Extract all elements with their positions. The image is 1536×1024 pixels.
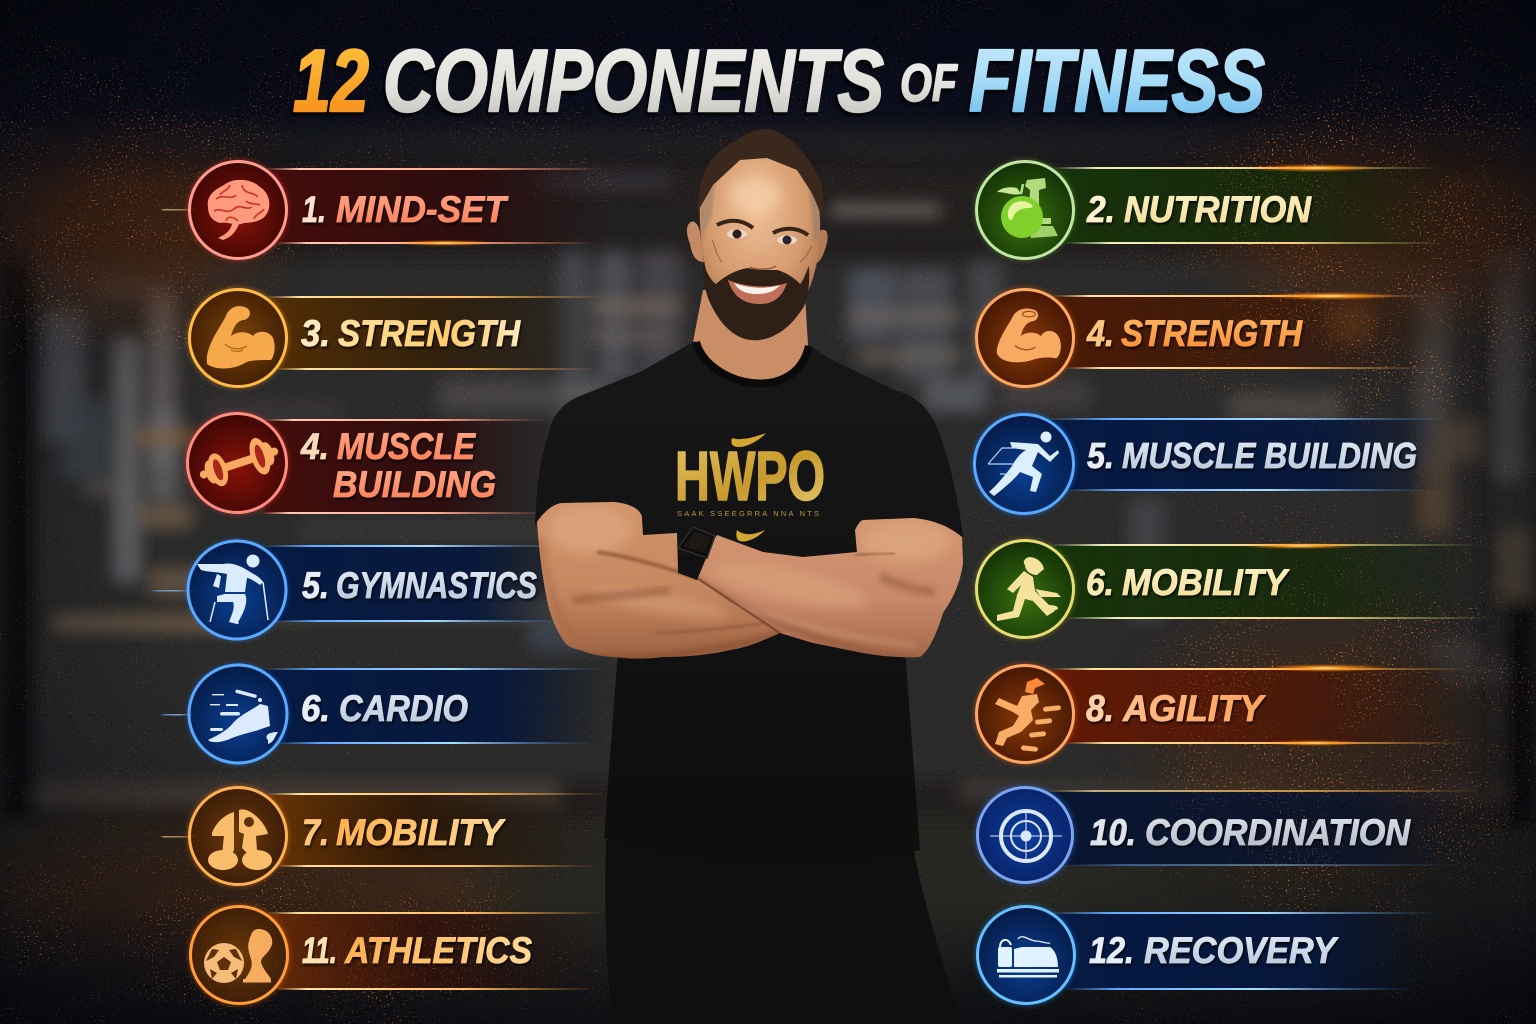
- icon: sprinter: [988, 432, 1059, 496]
- label: 5. MUSCLE BUILDING: MUSCLE BUILDING: [1122, 435, 1417, 476]
- label: 3. STRENGTH: 3.: [301, 313, 330, 354]
- label: 10. COORDINATION: 10.: [1090, 812, 1136, 853]
- label: 11. ATHLETICS: ATHLETICS: [344, 930, 532, 971]
- label: 4. MUSCLE BUILDING: [300, 426, 496, 505]
- icon: flexed bicep: [207, 306, 275, 368]
- shorts: [605, 840, 962, 1024]
- label: 4. MUSCLE BUILDING: MUSCLE: [337, 426, 476, 467]
- label: 4. STRENGTH: STRENGTH: [1121, 313, 1303, 354]
- ears: [687, 221, 704, 262]
- item 3: strength: [188, 288, 605, 388]
- beard: [703, 262, 809, 340]
- label: 3. STRENGTH: STRENGTH: [338, 313, 521, 354]
- t-shirt: [535, 341, 963, 864]
- icon: running shoe: [208, 689, 278, 744]
- short side streaks: [150, 209, 196, 838]
- item 12: recovery: [976, 905, 1440, 1005]
- label: 4. MUSCLE BUILDING: 4.: [300, 426, 329, 467]
- label: 6. MOBILITY: MOBILITY: [1122, 562, 1290, 603]
- icon: mobility symbol: [208, 809, 272, 870]
- label: 4. STRENGTH: 4.: [1086, 313, 1114, 354]
- label: 10. COORDINATION: COORDINATION: [1145, 812, 1411, 853]
- label: 6. CARDIO: CARDIO: [339, 688, 468, 729]
- label: 12. RECOVERY: RECOVERY: [1144, 930, 1339, 971]
- item 1: mind-set: [188, 160, 605, 260]
- label: 6. MOBILITY: 6.: [1086, 562, 1114, 603]
- right arm: [698, 518, 963, 658]
- item 11: athletics: [189, 905, 605, 1005]
- cheek lines: [712, 240, 812, 262]
- icon: recovery bed: [997, 937, 1059, 978]
- item 6: cardio: [188, 664, 605, 764]
- label: 11. ATHLETICS: 11.: [302, 930, 337, 971]
- item 5: gymnastics: [187, 540, 565, 640]
- left arm: [537, 502, 780, 659]
- title: FITNESS: [969, 31, 1265, 130]
- title: 12: [293, 31, 369, 130]
- label: 5. GYMNASTICS: 5.: [302, 565, 329, 606]
- label: 7. MOBILITY: 7.: [302, 812, 329, 853]
- label: 6. CARDIO: 6.: [301, 688, 330, 729]
- eyes and brows: [717, 221, 753, 228]
- label: 5. MUSCLE BUILDING: 5.: [1087, 435, 1114, 476]
- shirt print: HWPO: SAAK SSEEGRRA NNA NTS: [677, 509, 819, 518]
- central figure: smiling man with crossed arms: [530, 129, 970, 1024]
- title: COMPONENTS: [383, 31, 884, 130]
- item 8: agility: [975, 664, 1470, 764]
- icon: agility figure on ladder: [995, 678, 1061, 752]
- shirt print: HWPO: [675, 433, 825, 542]
- nose: [747, 255, 778, 270]
- neck: [678, 290, 828, 408]
- hair: [697, 129, 824, 220]
- label: 12. RECOVERY: 12.: [1089, 930, 1134, 971]
- item 5: muscle building (right): [973, 413, 1450, 515]
- icon: flexed bicep: [997, 309, 1061, 362]
- icon: brain: [208, 180, 269, 240]
- shirt print: HWPO: HWPO: [675, 437, 825, 515]
- label: 8. AGILITY: AGILITY: [1122, 688, 1266, 729]
- forehead highlight: [729, 177, 781, 213]
- label: 2. NUTRITION: 2.: [1086, 189, 1115, 230]
- label: 4. MUSCLE BUILDING: BUILDING: [333, 464, 496, 505]
- item 2: nutrition: [975, 160, 1452, 260]
- icon: gymnast figure: [197, 554, 268, 624]
- icon: dumbbell: [194, 432, 284, 494]
- label: 2. NUTRITION: NUTRITION: [1124, 189, 1312, 230]
- icon: ball and trophy: [204, 929, 272, 983]
- crossing shadow between forearms: [697, 578, 780, 633]
- label: 8. AGILITY: 8.: [1086, 688, 1114, 729]
- label: 1. MIND-SET: 1.: [302, 189, 326, 230]
- title: [293, 31, 1265, 130]
- temple fade: [700, 178, 716, 240]
- item 10: coordination: [975, 785, 1480, 885]
- icon: apple and bottle: [997, 178, 1058, 238]
- icon: smart watch: [678, 527, 715, 580]
- icon: target: [990, 811, 1062, 861]
- face: [700, 152, 820, 341]
- head: [687, 129, 828, 341]
- item 4: strength (right): [975, 288, 1442, 388]
- label: 7. MOBILITY: MOBILITY: [336, 812, 506, 853]
- item 6: mobility (right): [975, 539, 1495, 639]
- item 7: mobility: [188, 786, 605, 886]
- icon: lunging figure: [997, 557, 1061, 621]
- smile: [728, 280, 787, 304]
- item 4: muscle building: [186, 412, 555, 514]
- label: 5. GYMNASTICS: GYMNASTICS: [336, 565, 537, 606]
- label: 1. MIND-SET: MIND-SET: [336, 189, 509, 230]
- title: OF: [900, 54, 958, 113]
